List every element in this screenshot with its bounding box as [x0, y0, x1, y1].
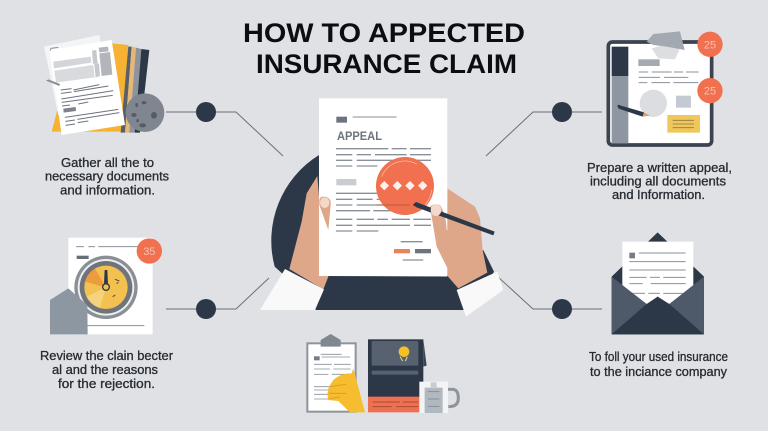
right cuff	[457, 272, 503, 317]
badge: 25 bottom: 25	[704, 86, 716, 98]
dark backdrop right	[447, 250, 494, 310]
caption: review claim	[40, 349, 173, 391]
left thumb	[319, 197, 331, 230]
yellow hand	[327, 368, 365, 412]
dark binder	[368, 339, 427, 412]
caption: prepare appeal: Prepare a written appeal,	[587, 161, 732, 175]
right hand	[430, 188, 487, 288]
dark backdrop circle	[271, 155, 463, 310]
badge: 25 top: 25	[704, 39, 716, 51]
caption: review claim: for the rejection.	[58, 377, 155, 391]
caption: review claim: al and the reasons	[52, 363, 158, 377]
title	[243, 18, 525, 79]
caption: follow up with insurer	[589, 350, 728, 379]
appeal document	[319, 98, 447, 276]
badge: 35: 35	[143, 246, 155, 258]
caption: gather documents: necessary documents	[45, 170, 169, 184]
left cuff	[260, 269, 324, 310]
icon: clipboard, binder and mug	[307, 334, 458, 413]
connector: bottom right	[497, 276, 602, 319]
caption: gather documents: and information.	[60, 184, 155, 198]
icon: documents folder	[44, 35, 164, 135]
central illustration: hands holding appeal	[260, 98, 503, 317]
title: INSURANCE CLAIM	[256, 49, 517, 79]
caption: follow up with insurer: To foll your used insurance	[589, 350, 728, 364]
connector: top left	[166, 102, 283, 156]
icon: written appeal tablet	[608, 31, 723, 145]
icon: review claim clock	[50, 238, 162, 334]
caption: follow up with insurer: to the inciance company	[590, 365, 728, 379]
stamp	[376, 157, 434, 215]
appeal document: APPEAL	[337, 129, 382, 143]
title: HOW TO APPECTED	[243, 18, 525, 48]
connector: top right	[486, 102, 602, 156]
right fingers	[430, 204, 467, 280]
caption: prepare appeal	[587, 161, 732, 202]
connector: bottom left	[166, 278, 269, 319]
mug	[419, 382, 458, 413]
caption: prepare appeal: including all documents	[590, 174, 726, 188]
caption: gather documents: Gather all the to	[61, 156, 154, 170]
caption: gather documents	[45, 156, 169, 198]
left hand	[289, 176, 331, 289]
caption: prepare appeal: and Information.	[612, 188, 705, 202]
icon: envelope	[612, 232, 704, 334]
pen	[413, 202, 495, 235]
clipboard	[307, 334, 356, 412]
caption: review claim: Review the clain becter	[40, 349, 173, 363]
